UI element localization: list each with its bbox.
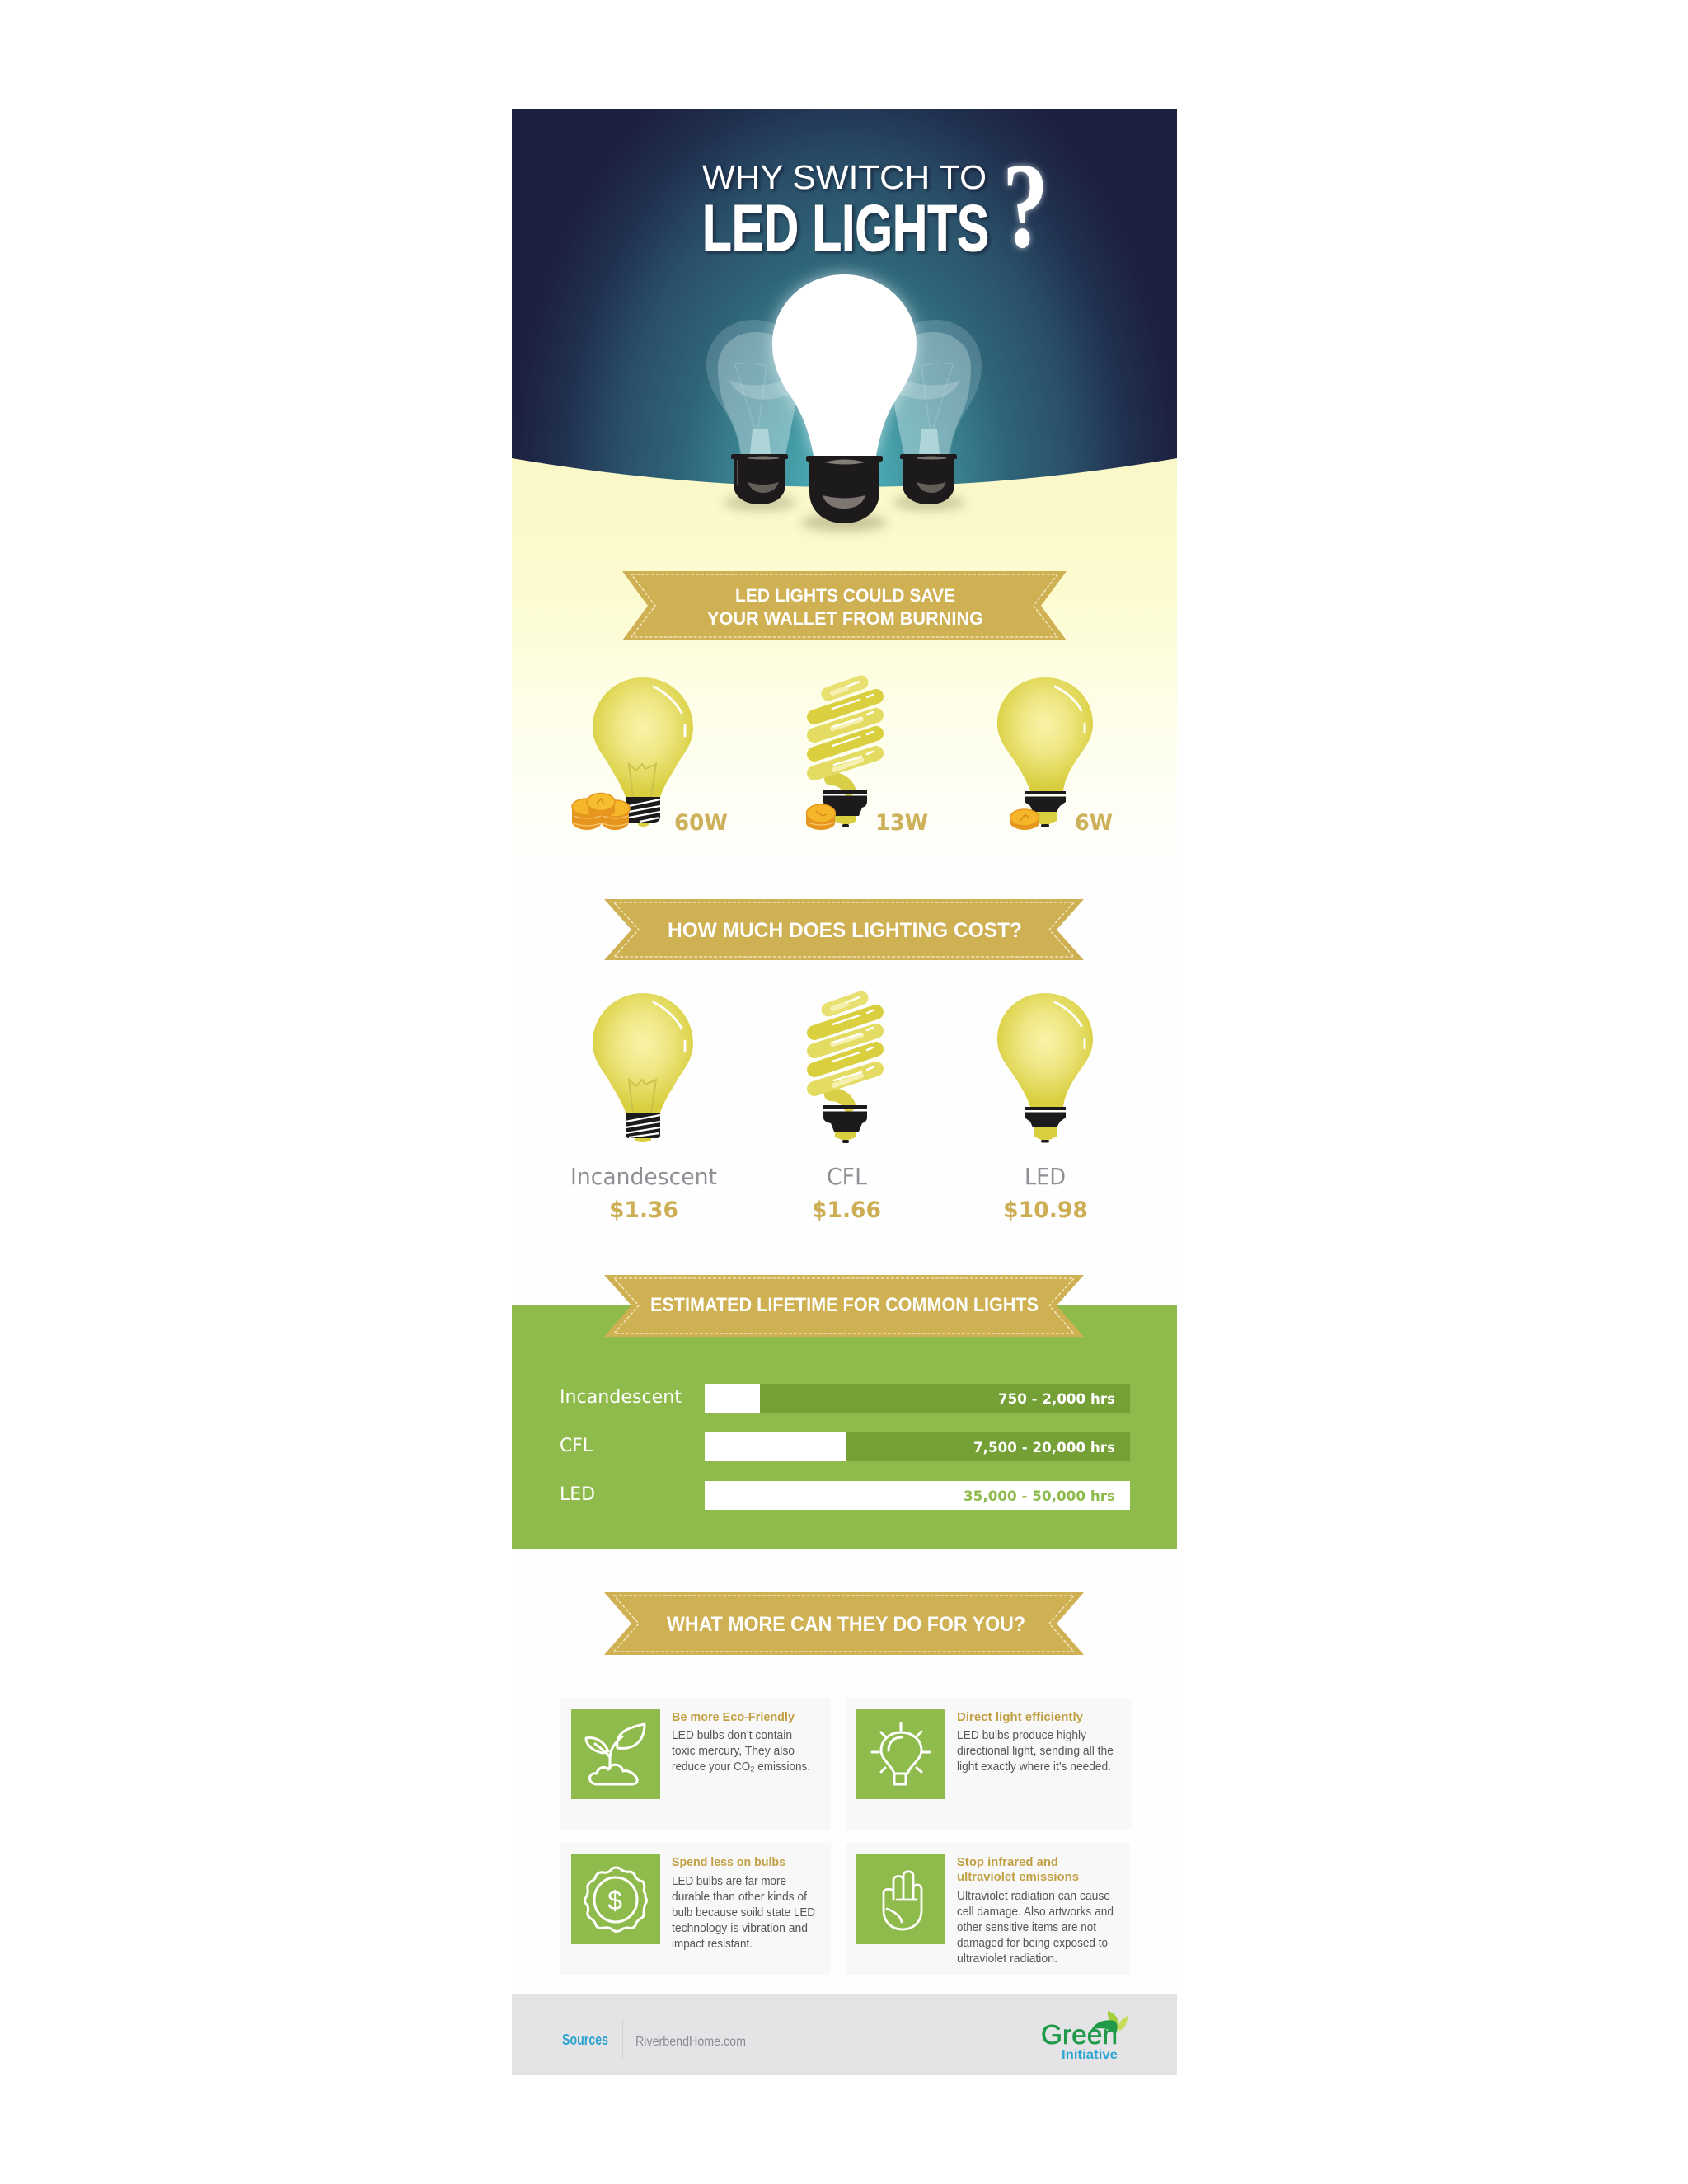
center base	[806, 456, 883, 523]
illustration: three glowing bulbs	[706, 274, 982, 532]
title	[702, 138, 1048, 274]
label: 6W: 6W	[1075, 810, 1113, 836]
icon: dollar gear	[571, 1854, 660, 1944]
text: direct light: Direct light efficiently	[957, 1710, 1084, 1724]
right base	[900, 454, 957, 504]
text: stop infrared: cell damage. Also artworks and	[957, 1905, 1114, 1919]
banner: wallet heading: LED LIGHTS COULD SAVE	[735, 585, 955, 606]
bulb: incandescent cost	[593, 993, 693, 1142]
bar: incandescent: Incandescent	[560, 1387, 682, 1408]
text: spend less: durable than other kinds of	[672, 1890, 808, 1904]
text: direct light	[957, 1710, 1114, 1774]
title: ?	[1002, 138, 1048, 274]
cost labels and prices: Incandescent	[570, 1163, 717, 1190]
sources label: Sources	[562, 2032, 608, 2048]
footer band	[512, 1994, 1177, 2075]
bar: CFL: CFL	[560, 1436, 593, 1456]
banner: wallet heading	[622, 571, 1067, 640]
bar: CFL: 7,500 - 20,000 hrs	[973, 1440, 1115, 1456]
title: WHY SWITCH TO	[702, 158, 987, 196]
icon: plant sprout	[571, 1709, 660, 1799]
source link text: RiverbendHome.com	[635, 2035, 746, 2049]
text: direct light: LED bulbs produce highly	[957, 1728, 1086, 1742]
panel: green lifetime section	[512, 1305, 1177, 1549]
card: spend less	[560, 1843, 831, 1975]
banner: lighting cost heading	[604, 899, 1084, 960]
bulb: LED cost	[997, 993, 1093, 1142]
right ghost bulb	[886, 320, 982, 455]
banner: wallet heading: YOUR WALLET FROM BURNING	[707, 608, 983, 629]
text: stop infrared: other sensitive items are not	[957, 1920, 1097, 1934]
left ghost bulb	[706, 320, 804, 455]
banner: what more heading: WHAT MORE CAN THEY DO FOR YOU?	[667, 1613, 1025, 1636]
bar: LED	[560, 1481, 1130, 1510]
card: direct light	[846, 1698, 1132, 1830]
card: stop infrared	[846, 1843, 1130, 1975]
text: eco-friendly: LED bulbs don’t contain	[672, 1728, 792, 1742]
coin	[1010, 809, 1039, 830]
text: direct light: light exactly where it’s needed.	[957, 1760, 1111, 1774]
text: eco-friendly: toxic mercury, They also	[672, 1744, 795, 1758]
icon: raised hand	[856, 1854, 945, 1944]
text: direct light: directional light, sending all the	[957, 1744, 1114, 1758]
text: spend less: impact resistant.	[672, 1937, 753, 1951]
bar: incandescent	[560, 1384, 1130, 1413]
text: eco-friendly	[672, 1710, 810, 1774]
shadows under bases	[724, 494, 796, 511]
logo: Green Initiative: Initiative	[1062, 2048, 1118, 2062]
banner: lifetime heading	[604, 1275, 1084, 1337]
text: eco-friendly: Be more Eco-Friendly	[672, 1710, 795, 1724]
card: eco-friendly	[560, 1698, 831, 1830]
poster background panel	[512, 109, 1177, 2075]
cost labels and prices	[570, 1163, 1088, 1223]
cost labels and prices: $1.66	[812, 1197, 881, 1223]
bar: CFL	[560, 1432, 1130, 1461]
bar chart: lifetime hours	[560, 1384, 1130, 1510]
cost labels and prices: LED	[1025, 1163, 1066, 1190]
text: eco-friendly: reduce your CO₂ emissions.	[672, 1760, 810, 1774]
coins	[572, 793, 630, 830]
cost labels and prices: CFL	[827, 1163, 867, 1190]
banner: lifetime heading: ESTIMATED LIFETIME FOR COMMON LIGHTS	[650, 1294, 1039, 1316]
bar: LED: 35,000 - 50,000 hrs	[964, 1488, 1115, 1505]
text: spend less: LED bulbs are far more	[672, 1874, 786, 1888]
logo: Green Initiative: Green	[1041, 2019, 1118, 2050]
bar: LED: LED	[560, 1484, 595, 1505]
banner: lighting cost heading: HOW MUCH DOES LIGHTING COST?	[668, 919, 1022, 942]
text: spend less	[672, 1855, 815, 1951]
panel: cream fade background	[512, 445, 1177, 874]
text: spend less: technology is vibration and	[672, 1921, 808, 1935]
icon: dollar gear: $	[607, 1886, 622, 1915]
panel: navy header with teal glow	[512, 109, 1177, 487]
text: stop infrared: ultraviolet radiation.	[957, 1952, 1057, 1966]
label: 60W: 60W	[674, 810, 728, 836]
text: spend less: bulb because soild state LED	[672, 1905, 815, 1919]
text: stop infrared	[957, 1855, 1114, 1966]
cost labels and prices: $1.36	[609, 1197, 678, 1223]
left base	[731, 454, 788, 504]
label: 13W: 13W	[875, 810, 928, 836]
text: spend less: Spend less on bulbs	[672, 1855, 785, 1869]
bulb: incandescent 60W with coins	[572, 677, 693, 830]
cost labels and prices: $10.98	[1003, 1197, 1088, 1223]
banner: what more heading	[604, 1592, 1084, 1655]
bulb: CFL 13W with coin	[806, 682, 876, 830]
text: stop infrared: damaged for being exposed to	[957, 1936, 1108, 1950]
coin	[806, 804, 836, 830]
bulb: CFL cost	[814, 997, 876, 1143]
icon: light bulb	[856, 1709, 945, 1799]
logo: Green Initiative	[1041, 2011, 1128, 2062]
text: stop infrared: Stop infrared and	[957, 1855, 1058, 1869]
bulb: LED 6W with coin	[997, 677, 1093, 830]
central glowing bulb	[772, 274, 917, 456]
title: LED LIGHTS	[702, 191, 989, 265]
text: stop infrared: ultraviolet emissions	[957, 1870, 1079, 1884]
bar: incandescent: 750 - 2,000 hrs	[998, 1391, 1115, 1408]
text: stop infrared: Ultraviolet radiation can cause	[957, 1889, 1110, 1903]
